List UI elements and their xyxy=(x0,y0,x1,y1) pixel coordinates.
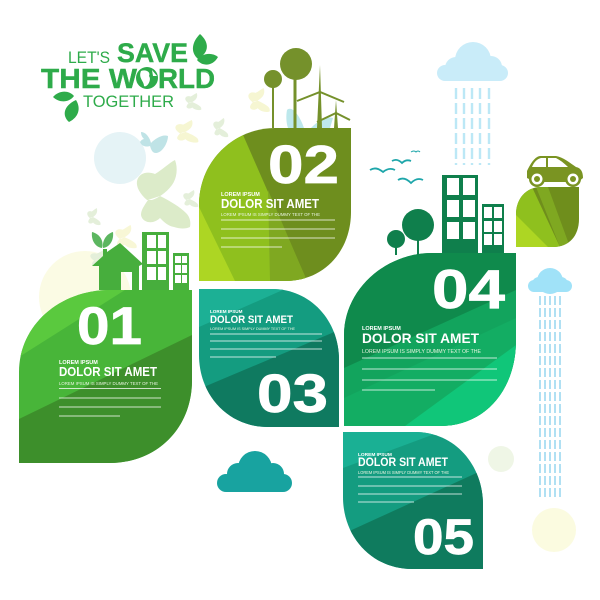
text block 02 xyxy=(221,192,335,247)
text block 03 xyxy=(210,309,322,357)
butterfly: blue behind turbines xyxy=(286,109,333,128)
icon: small leaf xyxy=(516,187,579,247)
panel: leaf 05 xyxy=(343,432,483,569)
text block 05: DOLOR SIT AMET xyxy=(358,457,448,469)
icon: blue cloud with rain xyxy=(437,42,508,165)
title: LET'S xyxy=(68,49,110,67)
icon: house and buildings xyxy=(92,232,189,290)
text block 04: LOREM IPSUM IS SIMPLY DUMMY TEXT OF THE xyxy=(362,349,482,355)
text block 01: LOREM IPSUM IS SIMPLY DUMMY TEXT OF THE xyxy=(59,381,158,386)
icon: teal cloud xyxy=(217,451,292,492)
text block 04: LOREM IPSUM xyxy=(362,326,401,332)
title: TOGETHER xyxy=(83,92,174,111)
leaf 05 shape xyxy=(343,432,483,569)
panel: leaf 04 xyxy=(344,175,516,426)
icon: light blue cloud with rain xyxy=(528,268,572,497)
text block 02: DOLOR SIT AMET xyxy=(221,196,319,211)
panel: leaf 03 xyxy=(199,289,339,427)
icon: title leaves left xyxy=(53,92,79,122)
icon: trees and buildings xyxy=(387,175,504,255)
title: SAVE xyxy=(117,38,188,68)
text block 01: DOLOR SIT AMET xyxy=(59,364,157,379)
background circles xyxy=(39,132,576,552)
panel: leaf 02 xyxy=(199,48,351,281)
text block 01: LOREM IPSUM xyxy=(59,360,98,366)
icon: title leaves right xyxy=(193,34,218,65)
text block 04 xyxy=(362,326,497,390)
title: RLD xyxy=(158,63,215,94)
number 02: 02 xyxy=(268,135,339,195)
number 01: 01 xyxy=(77,297,142,356)
icon: car xyxy=(527,156,583,187)
text block 02: LOREM IPSUM IS SIMPLY DUMMY TEXT OF THE xyxy=(221,212,320,217)
text block 01 xyxy=(59,360,161,416)
text block 02: LOREM IPSUM xyxy=(221,192,260,198)
icon: trees and wind turbines xyxy=(264,48,350,128)
leaf 01 shape xyxy=(19,290,192,463)
text block 03: LOREM IPSUM IS SIMPLY DUMMY TEXT OF THE xyxy=(210,326,295,331)
icon: birds xyxy=(370,151,423,183)
panel: leaf 01 xyxy=(19,232,192,463)
text block 05 xyxy=(358,452,462,502)
number 03: 03 xyxy=(257,364,328,424)
number 04: 04 xyxy=(432,258,505,320)
number 05: 05 xyxy=(413,509,474,565)
text block 04: DOLOR SIT AMET xyxy=(362,330,479,346)
leaf 04 shape xyxy=(344,253,516,426)
icon: globe xyxy=(136,67,158,89)
butterflies xyxy=(87,88,333,268)
text block 05: LOREM IPSUM IS SIMPLY DUMMY TEXT OF THE xyxy=(358,470,449,475)
title: O xyxy=(137,63,158,94)
title xyxy=(41,34,218,122)
leaf 03 shape xyxy=(199,289,339,427)
butterfly: blue small xyxy=(140,132,168,153)
leaf 02 shape xyxy=(199,128,351,281)
title: THE W xyxy=(41,63,138,94)
text block 05: LOREM IPSUM xyxy=(358,452,392,458)
text block 03: LOREM IPSUM xyxy=(210,309,243,314)
text block 03: DOLOR SIT AMET xyxy=(210,314,293,326)
